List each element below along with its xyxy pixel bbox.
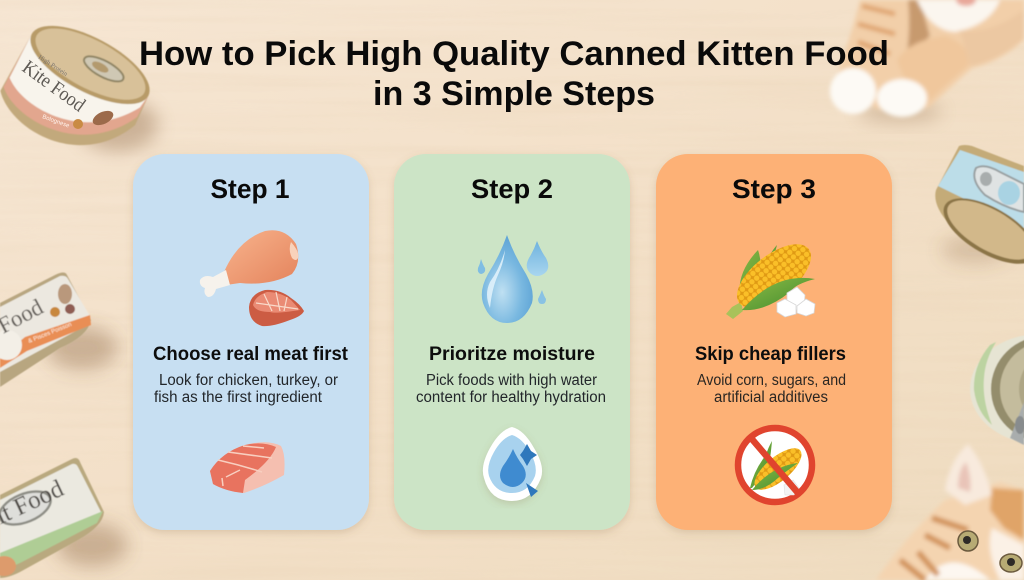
title: in 3 Simple Steps [373,75,655,113]
step 3 heading: Step 3 [732,174,816,204]
kitten: top right paws [830,0,1024,122]
icon: raw meat cut [210,442,285,493]
can: top left Kite Food: Bolognese [41,114,71,130]
icon: chicken drumstick [200,230,298,297]
icon: no corn sign [738,428,812,502]
can: left middle Food [0,272,118,387]
title [139,35,889,113]
icon: moisture badge [483,427,542,501]
can: right middle green [970,334,1024,445]
description: step 2 [416,372,606,406]
panel: step 1 [133,154,369,530]
description: step 3: Avoid corn, sugars, and [697,372,846,389]
description: step 1 [154,372,338,406]
step 1 heading: Step 1 [210,174,290,204]
description: step 1: fish as the first ingredient [154,389,323,406]
kitten: bottom right face [876,444,1024,580]
icon: water drops [478,235,548,323]
can: top left Kite Food [0,10,163,172]
title: How to Pick High Quality Canned Kitten Food [139,35,889,73]
can: top left Kite Food: Kite Food [18,56,89,116]
can: right top blue [933,145,1024,277]
description: step 1: Look for chicken, turkey, or [159,372,338,389]
subheading: skip cheap fillers: Skip cheap fillers [695,344,846,365]
icon: corn and sugar cubes [726,232,822,320]
description: step 3 [697,372,846,406]
subheading: prioritze moisture: Prioritze moisture [429,344,595,365]
step 2 heading: Step 2 [471,174,553,204]
subheading: choose real meat first: Choose real meat first [153,344,349,365]
description: step 2: Pick foods with high water [426,372,597,389]
can: left middle Food: & Pisces Poisson [28,322,73,345]
can: bottom left Kit Food [0,458,128,578]
panel: step 2 [394,154,630,530]
can: top left Kite Food: High Protein [37,54,69,78]
icon: salmon steak [249,290,304,326]
description: step 2: content for healthy hydration [416,389,606,406]
panel: step 3 [656,154,892,530]
description: step 3: artificial additives [714,389,828,406]
icon: sugar cubes [777,287,815,317]
